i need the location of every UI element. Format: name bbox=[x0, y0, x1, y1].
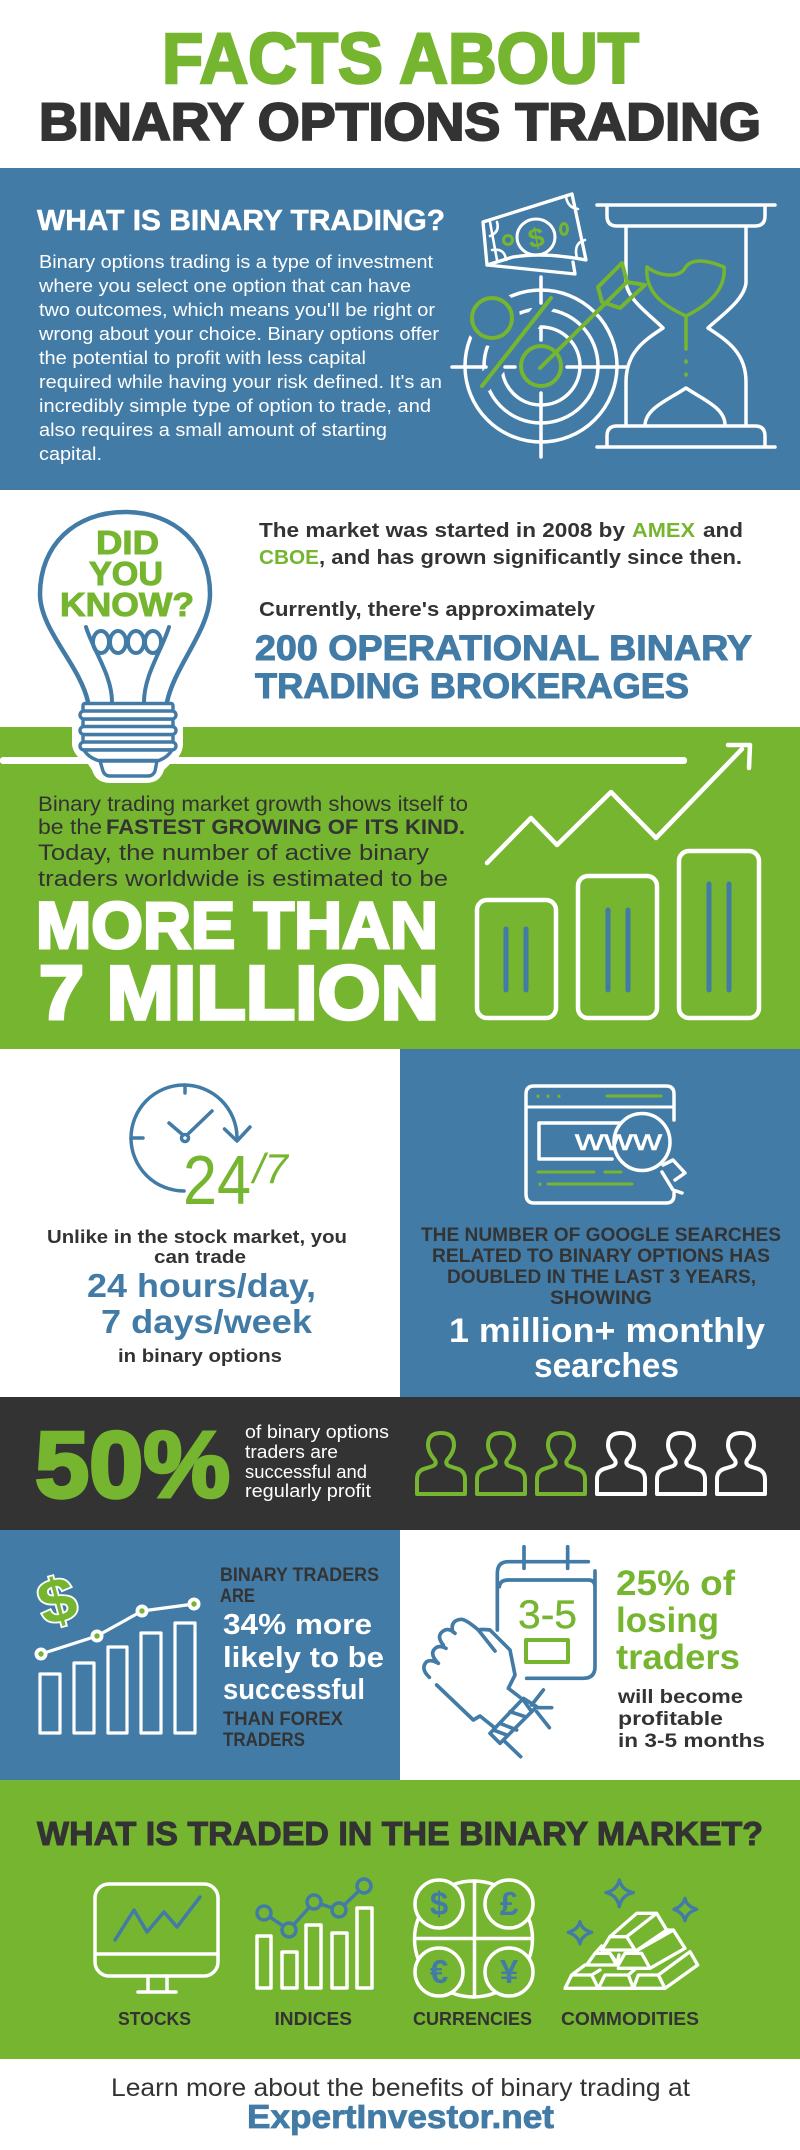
chart: rising bars with line bbox=[34, 1598, 200, 1733]
icon: browser search bbox=[526, 1086, 685, 1203]
text block: definition: two outcomes, which means you'll be right or bbox=[39, 299, 435, 320]
heading: what is traded: WHAT IS TRADED IN THE BINARY MARKET? bbox=[37, 1815, 763, 1852]
text block: 34 percent bbox=[220, 1565, 384, 1751]
labels: traded assets: COMMODITIES bbox=[561, 2009, 699, 2029]
icon: currencies: € bbox=[430, 1953, 448, 1990]
text block: 34 percent: THAN FOREX bbox=[223, 1709, 343, 1730]
text block: growth: Binary trading market growth shows itself to bbox=[38, 793, 468, 816]
footer: ExpertInvestor.net bbox=[247, 2098, 554, 2135]
icon: calendar: 3-5 bbox=[518, 1593, 577, 1637]
panel: what is binary trading bbox=[0, 168, 800, 490]
big number: 200 brokerages: TRADING BROKERAGES bbox=[255, 667, 689, 706]
icon: money bills bbox=[483, 194, 586, 274]
heading: did you know: YOU bbox=[89, 555, 163, 592]
icon: hand bbox=[424, 1619, 552, 1757]
text block: market start: CBOE bbox=[259, 546, 319, 569]
text block: 34 percent: TRADERS bbox=[223, 1730, 305, 1751]
icon: indices chart bbox=[257, 1879, 372, 1988]
footer bbox=[111, 2074, 690, 2135]
text block: market start: AMEX bbox=[632, 519, 695, 542]
text block: 25 percent: will become bbox=[617, 1687, 743, 1708]
text block: 25 percent: profitable bbox=[618, 1709, 723, 1730]
icon: hourglass bbox=[597, 205, 775, 447]
text block: trade anytime: 24 hours/day, bbox=[87, 1268, 316, 1305]
big number: more than 7 million: 7 MILLION bbox=[39, 951, 439, 1036]
panel: what is traded bbox=[0, 1780, 800, 2059]
icon: currencies bbox=[414, 1880, 533, 1997]
text block: market start bbox=[259, 519, 743, 621]
icon: clock bbox=[131, 1085, 250, 1191]
text block: 25 percent: 25% of bbox=[616, 1564, 735, 1603]
labels: traded assets: CURRENCIES bbox=[413, 2009, 532, 2029]
labels: traded assets bbox=[118, 2009, 699, 2029]
icon: currencies: £ bbox=[500, 1885, 519, 1922]
title: FACTS ABOUT bbox=[162, 20, 639, 99]
panel: 24/7 trading bbox=[47, 1085, 347, 1366]
big number: 1 million searches bbox=[449, 1312, 765, 1385]
panel: market growth bbox=[0, 727, 800, 1049]
text block: 34 percent: 34% more bbox=[223, 1609, 372, 1641]
panel: 50 percent bbox=[0, 1397, 800, 1530]
text block: 34 percent: ARE bbox=[220, 1586, 255, 1607]
text block: trade anytime: Unlike in the stock market, you bbox=[47, 1226, 347, 1247]
icon: currencies: ¥ bbox=[500, 1953, 519, 1990]
footer: Learn more about the benefits of binary trading at bbox=[111, 2074, 690, 2102]
big number: 200 brokerages bbox=[255, 629, 752, 706]
text block: successful traders: of binary options bbox=[245, 1421, 389, 1442]
text block: definition: capital. bbox=[39, 443, 102, 464]
panel: more likely to be successful bbox=[0, 1530, 400, 1780]
text block: 25 percent bbox=[616, 1564, 765, 1752]
icon: target bbox=[452, 277, 627, 457]
heading: did you know bbox=[60, 524, 194, 623]
text block: market start: Currently, there's approximately bbox=[259, 598, 596, 621]
text block: definition bbox=[38, 251, 442, 464]
big number: 1 million searches: 1 million+ monthly bbox=[449, 1312, 765, 1350]
icon: stocks monitor bbox=[95, 1884, 218, 1992]
icon: 24/7: 24 bbox=[183, 1141, 251, 1219]
text block: definition: required while having your risk defined. It's an bbox=[39, 371, 442, 392]
text block: market start: The market was started in 2008 by bbox=[259, 519, 626, 542]
text block: successful traders: successful and bbox=[245, 1461, 367, 1482]
big number: more than 7 million bbox=[36, 888, 439, 1036]
text block: growth: Today, the number of active binary bbox=[38, 840, 430, 865]
labels: traded assets: INDICES bbox=[274, 2009, 352, 2029]
text block: definition: the potential to profit with less capital bbox=[39, 347, 366, 368]
icon: dollar sign: $ bbox=[31, 1563, 84, 1640]
icon: calendar bbox=[497, 1547, 595, 1678]
icon: hourglass sand bbox=[647, 261, 724, 375]
text block: definition: where you select one option that can have bbox=[38, 275, 411, 296]
big number: 200 brokerages: 200 OPERATIONAL BINARY bbox=[255, 629, 752, 668]
panel: losing traders bbox=[424, 1547, 765, 1757]
icon: percent sign bbox=[472, 298, 561, 386]
text block: 25 percent: traders bbox=[616, 1638, 740, 1677]
text block: market start: and bbox=[703, 519, 743, 542]
text block: definition: wrong about your choice. Binary options offer bbox=[38, 323, 439, 344]
text block: definition: also requires a small amount of starting bbox=[39, 419, 387, 440]
title bbox=[39, 20, 761, 152]
text block: trade anytime: in binary options bbox=[118, 1345, 282, 1366]
text block: searches doubled bbox=[421, 1225, 781, 1309]
icon: light bulb bbox=[40, 512, 210, 783]
panel: google searches bbox=[400, 1049, 800, 1397]
text block: 34 percent: likely to be bbox=[223, 1642, 384, 1674]
icon: money bills: $ bbox=[526, 222, 547, 254]
big number: more than 7 million: MORE THAN bbox=[36, 888, 438, 962]
text block: market start: , and has grown significantly since then. bbox=[319, 546, 742, 569]
text block: trade anytime: can trade bbox=[154, 1246, 246, 1267]
text block: 25 percent: in 3-5 months bbox=[618, 1731, 765, 1752]
icon: six people bbox=[417, 1433, 765, 1494]
icon: browser search: www bbox=[574, 1124, 662, 1157]
text block: searches doubled: SHOWING bbox=[550, 1288, 652, 1309]
title: BINARY OPTIONS TRADING bbox=[39, 93, 761, 152]
text block: successful traders: regularly profit bbox=[245, 1480, 371, 1501]
chart: growth bars bbox=[477, 851, 759, 1018]
text block: searches doubled: THE NUMBER OF GOOGLE SEARCHES bbox=[421, 1225, 781, 1246]
labels: traded assets: STOCKS bbox=[118, 2009, 191, 2029]
heading: what is binary trading: WHAT IS BINARY TRADING? bbox=[37, 205, 445, 237]
text block: definition: incredibly simple type of option to trade, and bbox=[39, 395, 431, 416]
text block: growth: traders worldwide is estimated to be bbox=[38, 866, 448, 891]
icon: 24/7: /7 bbox=[250, 1145, 290, 1192]
text block: growth bbox=[38, 793, 468, 891]
big number: 1 million searches: searches bbox=[534, 1347, 679, 1385]
text block: successful traders bbox=[245, 1421, 389, 1501]
text block: growth: FASTEST GROWING OF ITS KIND. bbox=[106, 816, 465, 839]
text block: searches doubled: DOUBLED IN THE LAST 3 YEARS, bbox=[447, 1267, 756, 1288]
text block: 34 percent: BINARY TRADERS bbox=[220, 1565, 379, 1586]
big number: 50%: 50% bbox=[35, 1412, 230, 1517]
text block: searches doubled: RELATED TO BINARY OPTIONS HAS bbox=[432, 1246, 770, 1267]
heading: did you know: DID bbox=[96, 524, 159, 561]
text block: growth: be the bbox=[38, 816, 102, 839]
text block: trade anytime: 7 days/week bbox=[101, 1304, 312, 1341]
text block: definition: Binary options trading is a type of investment bbox=[39, 251, 433, 272]
icon: arrow bbox=[540, 263, 645, 368]
text block: 25 percent: losing bbox=[616, 1601, 719, 1640]
text block: 34 percent: successful bbox=[223, 1674, 365, 1706]
text block: successful traders: traders are bbox=[245, 1441, 338, 1462]
panel: did you know bbox=[40, 512, 752, 783]
icon: currencies: $ bbox=[430, 1885, 448, 1922]
icon: commodities gold bbox=[565, 1880, 698, 1988]
chart: growth arrow line bbox=[487, 745, 750, 863]
text block: trade anytime bbox=[47, 1226, 347, 1366]
heading: did you know: KNOW? bbox=[60, 586, 194, 623]
